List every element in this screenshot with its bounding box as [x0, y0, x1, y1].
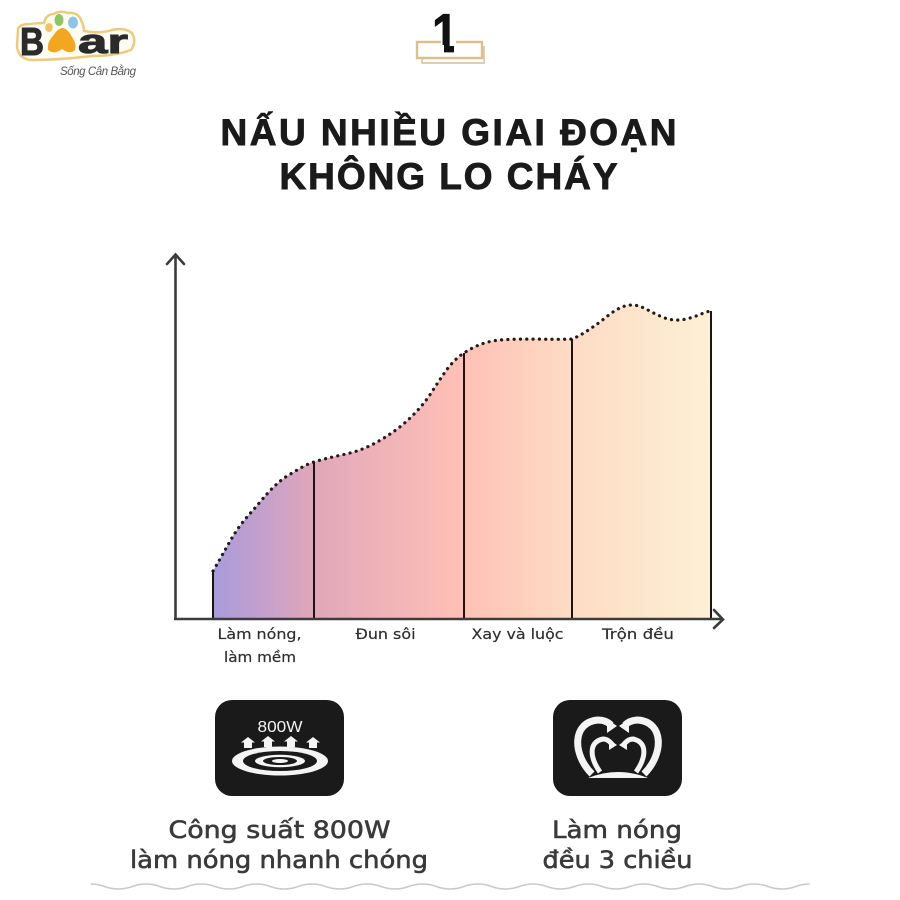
- chart: cooking stages curve: [167, 254, 723, 628]
- title: [220, 112, 676, 197]
- icon: 800W heating: 800W: [258, 719, 303, 736]
- icon: 3D heating: [553, 700, 682, 796]
- caption: 800W power: [130, 816, 428, 874]
- stage dividers: [213, 311, 711, 619]
- title: NẤU NHIỀU GIAI ĐOẠN: [220, 112, 676, 153]
- logo wordmark: ar: [78, 23, 128, 61]
- logo wordmark: [20, 21, 128, 64]
- caption: 3D heating: [542, 816, 692, 874]
- stage labels: Đun sôi: [356, 627, 416, 643]
- logo wordmark: B: [20, 21, 44, 64]
- caption: 800W power: làm nóng nhanh chóng: [130, 846, 428, 874]
- icon: 800W heating: [215, 700, 344, 796]
- caption: 3D heating: Làm nóng: [552, 816, 682, 844]
- caption: 800W power: Công suất 800W: [168, 816, 390, 844]
- stage labels: Trộn đều: [601, 626, 674, 643]
- stage labels: [218, 626, 674, 666]
- page number badge: [416, 14, 485, 64]
- stage labels: làm mềm: [224, 649, 296, 666]
- horizontal axis arrow: [174, 610, 723, 628]
- gradient area under curve: [213, 305, 711, 619]
- title: KHÔNG LO CHÁY: [280, 155, 618, 197]
- caption: 3D heating: đều 3 chiều: [542, 846, 692, 874]
- stage labels: Làm nóng,: [218, 627, 302, 643]
- vertical axis arrow: [167, 254, 184, 619]
- number 1: 1: [432, 2, 458, 64]
- logo signature: Sống Cân Bằng: [60, 65, 137, 78]
- dotted curve: [213, 305, 711, 571]
- stage labels: Xay và luộc: [472, 627, 564, 643]
- logo: Bear: [17, 12, 137, 78]
